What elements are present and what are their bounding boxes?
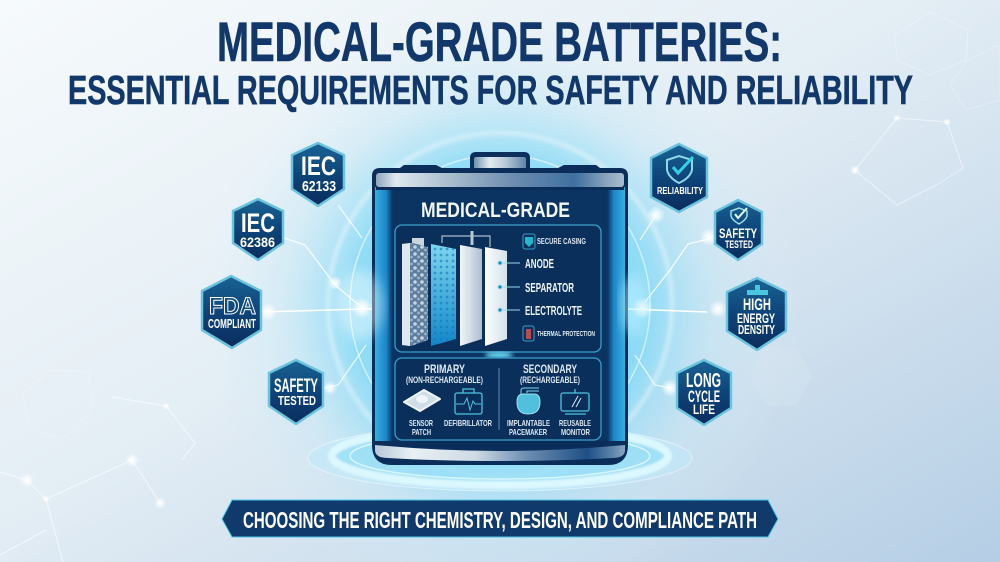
panel: battery types <box>395 358 601 440</box>
badge: IEC 62133 <box>292 143 344 206</box>
primary heading <box>406 362 483 385</box>
badge: safety tested right: TESTED <box>725 239 753 251</box>
icon: sensor patch <box>404 390 440 411</box>
icon: reusable monitor <box>561 389 589 414</box>
cell layer 4 <box>485 247 507 346</box>
device labels: REUSABLE <box>559 418 591 428</box>
icon: defibrillator <box>455 389 482 414</box>
badge: high energy density: DENSITY <box>738 322 775 337</box>
terminal lead <box>470 231 474 245</box>
device labels: PATCH <box>412 427 431 437</box>
badge: high energy density: ENERGY <box>737 310 775 326</box>
badge: IEC 62386 <box>233 199 283 260</box>
energy circles and connectors <box>259 133 727 477</box>
badge: IEC 62133: 62133 <box>302 178 336 195</box>
cell layer 3 <box>460 245 482 346</box>
badge: IEC 62386: 62386 <box>240 234 275 250</box>
battery terminal <box>470 152 530 170</box>
device labels: SENSOR <box>409 418 433 428</box>
label: separator: SEPARATOR <box>525 280 574 295</box>
badge: FDA compliant <box>202 276 261 348</box>
secondary heading: (RECHARGEABLE) <box>520 375 580 385</box>
primary heading: (NON-RECHARGEABLE) <box>406 375 483 385</box>
badge: long cycle life: LIFE <box>693 401 715 417</box>
badge: safety tested left: SAFETY <box>274 376 318 397</box>
badge: IEC 62133: IEC <box>301 151 336 181</box>
badge: IEC 62386: IEC <box>241 208 275 238</box>
badge: safety tested right <box>715 200 762 260</box>
secondary heading <box>520 362 580 385</box>
badge: safety tested left <box>269 360 323 424</box>
battery <box>336 152 648 465</box>
cell layer 2 <box>431 236 490 346</box>
label: electrolyte: ELECTROLYTE <box>525 303 582 318</box>
label: thermal protection: THERMAL PROTECTION <box>537 329 595 338</box>
device labels: IMPLANTABLE <box>507 418 550 428</box>
badge: FDA compliant: FDA <box>209 293 256 320</box>
badge: reliability <box>651 144 707 212</box>
device labels: PACEMAKER <box>509 427 547 437</box>
faint hexagon decoration <box>750 347 812 405</box>
label: anode: ANODE <box>525 256 554 271</box>
battery body <box>336 165 648 465</box>
glowing base rings <box>308 425 692 491</box>
badge: long cycle life: LONG <box>686 370 721 392</box>
badge: reliability: RELIABILITY <box>657 186 703 197</box>
badge: high energy density <box>727 278 786 350</box>
icon: thermal protection <box>523 326 534 341</box>
badge: safety tested left: TESTED <box>278 393 316 408</box>
badge: high energy density: HIGH <box>743 295 771 314</box>
badge: safety tested right: SAFETY <box>719 225 757 241</box>
primary heading: PRIMARY <box>424 362 465 376</box>
callout leaders <box>498 261 520 312</box>
bottom banner <box>222 500 778 537</box>
network decoration: bottom left <box>0 370 195 562</box>
cell layer 1 <box>402 238 428 346</box>
icon: shield check <box>667 156 693 183</box>
device labels: DEFIBRILLATOR <box>444 418 492 428</box>
glow accent <box>485 352 513 358</box>
icon: implantable pacemaker <box>517 388 540 414</box>
icon: small shield check <box>731 208 747 224</box>
label: secure casing: SECURE CASING <box>537 237 586 246</box>
icon: battery <box>747 285 768 295</box>
badge: long cycle life <box>677 360 731 425</box>
icon: secure casing shield <box>523 234 535 249</box>
network decoration: top right <box>850 12 1000 205</box>
device labels <box>409 418 591 437</box>
device labels: MONITOR <box>561 427 590 437</box>
panel: battery cell layers <box>395 225 601 352</box>
title <box>68 10 913 113</box>
battery label: MEDICAL-GRADE <box>421 199 570 222</box>
badge: FDA compliant: COMPLIANT <box>208 317 256 331</box>
badge: long cycle life: CYCLE <box>688 387 720 406</box>
secondary heading: SECONDARY <box>523 362 577 376</box>
